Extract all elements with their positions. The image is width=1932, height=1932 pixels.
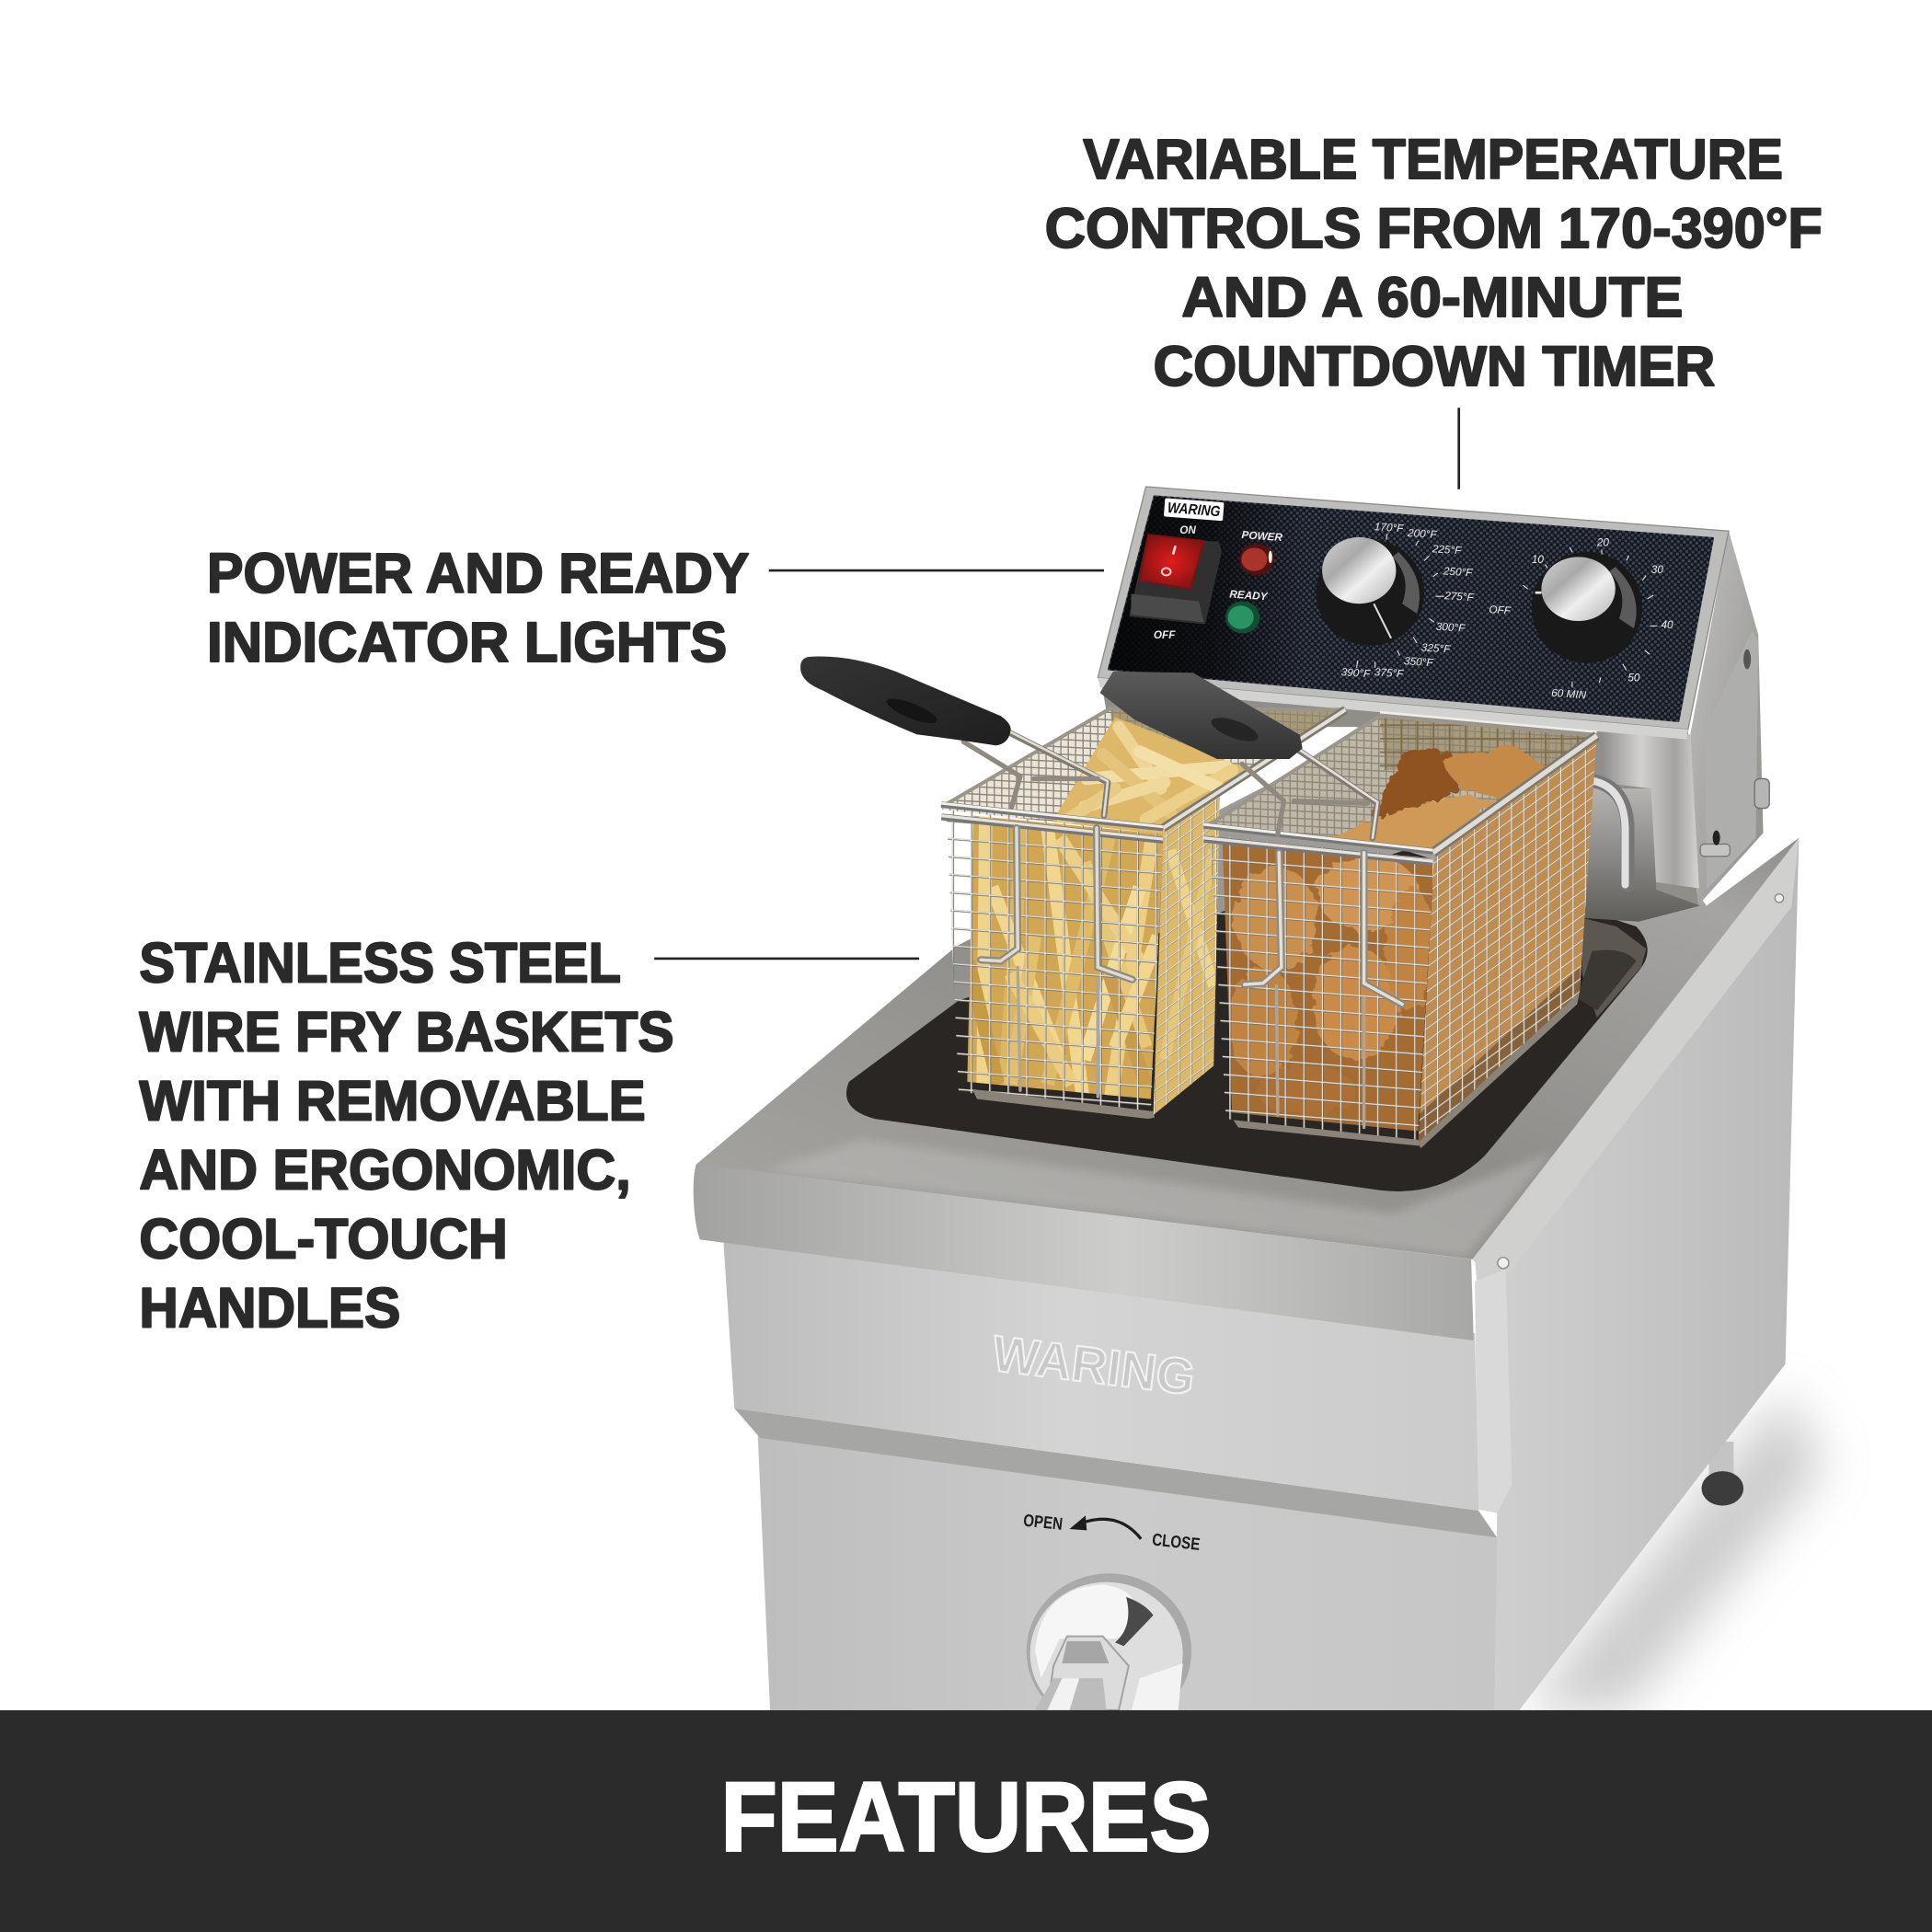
rocker switch [1131, 535, 1220, 622]
panel labels: OFF [1154, 629, 1176, 641]
housing lower front [1602, 730, 1699, 889]
callout: fry baskets: HANDLES [139, 1276, 400, 1339]
panel labels: 225°F [1431, 543, 1463, 557]
fries behind mesh [967, 816, 1163, 1099]
panel labels: 275°F [1443, 590, 1475, 604]
embossed logo: WARING [989, 1325, 1198, 1406]
callout: fry baskets [139, 931, 674, 1339]
panel labels: 40 [1662, 619, 1673, 631]
drain valve labels [1022, 1511, 1201, 1554]
upper front panel [723, 1238, 1478, 1511]
side lip [1472, 838, 1799, 1282]
panel labels: 350°F [1404, 655, 1434, 669]
panel labels: POWER [1241, 529, 1283, 544]
left fry basket [937, 702, 1355, 1119]
fryer illustration [694, 487, 1799, 1729]
leader line: indicator lights [769, 569, 1104, 571]
callout: fry baskets: AND ERGONOMIC, [139, 1138, 631, 1201]
front mesh [1210, 835, 1434, 1143]
side edge strip [1475, 1269, 1512, 1513]
dial ticks [1357, 534, 1657, 687]
panel labels: 30 [1651, 564, 1663, 576]
chicken behind mesh [1223, 838, 1434, 1131]
basket rim [941, 708, 1345, 840]
callout: indicator lights: POWER AND READY [207, 542, 749, 604]
callout: fry baskets: STAINLESS STEEL [139, 931, 621, 994]
panel labels: 390°F [1340, 666, 1371, 680]
callout: temperature controls: AND A 60-MINUTE [1181, 266, 1683, 328]
icon: rubber foot [1702, 1442, 1743, 1506]
tabletop highlight [764, 1140, 1553, 1257]
basket hanger wires [981, 828, 1133, 1097]
panel labels: READY [1229, 588, 1269, 603]
side face [1419, 736, 1597, 1143]
callout: temperature controls: VARIABLE TEMPERATURE [1083, 128, 1783, 190]
power light [1239, 544, 1274, 575]
callout: temperature controls: CONTROLS FROM 170-390°F [1045, 197, 1823, 259]
logo: WARING [1167, 500, 1221, 520]
drain valve labels: CLOSE [1151, 1530, 1201, 1554]
front mesh [947, 810, 1163, 1115]
panel labels: 60 MIN [1551, 687, 1587, 701]
panel labels: ON [1179, 524, 1196, 536]
panel labels: OFF [1489, 604, 1512, 617]
panel labels: 20 [1596, 536, 1609, 548]
callout: fry baskets: COOL-TOUCH [139, 1207, 508, 1270]
right handle [1101, 673, 1301, 758]
callout: indicator lights [207, 542, 749, 673]
panel labels: 50 [1627, 673, 1640, 684]
side panel [1475, 838, 1799, 1710]
tabletop [696, 740, 1799, 1259]
panel labels: 300°F [1435, 621, 1466, 635]
callout: indicator lights: INDICATOR LIGHTS [207, 611, 727, 673]
ready light [1225, 602, 1259, 633]
callout: temperature controls: COUNTDOWN TIMER [1154, 335, 1715, 397]
control panel frame [1098, 487, 1729, 730]
panel labels: 10 [1532, 554, 1544, 566]
basket opening [1214, 718, 1587, 848]
front lip [694, 1165, 1474, 1340]
callout: fry baskets: WITH REMOVABLE [139, 1069, 646, 1132]
band [734, 1409, 1497, 1537]
control panel [1097, 487, 1713, 720]
footer banner [0, 1710, 1932, 1932]
panel labels [1154, 521, 1673, 701]
floor shadow [1522, 1392, 1823, 1710]
basket opening [942, 710, 1334, 834]
housing side plate [1706, 631, 1758, 890]
heating element tube [1587, 780, 1627, 885]
valve stem [1035, 1678, 1107, 1710]
drain valve [1027, 1573, 1191, 1729]
timer knob [1532, 552, 1642, 663]
leader line: fry baskets [654, 958, 919, 960]
drain valve labels: OPEN [1022, 1511, 1064, 1534]
well opening [846, 850, 1648, 1191]
banner heading: FEATURES [720, 1762, 1212, 1872]
callout: fry baskets: WIRE FRY BASKETS [139, 1000, 674, 1063]
bolts [1498, 650, 1784, 1269]
basket rim [1203, 712, 1597, 863]
panel labels: 375°F [1374, 666, 1405, 680]
leader line: temperature controls [1458, 408, 1460, 489]
back wall [1100, 675, 1698, 905]
right fry basket [1202, 708, 1608, 1148]
panel labels: 170°F [1374, 521, 1405, 535]
side face [1154, 795, 1220, 1115]
panel labels: 200°F [1407, 527, 1438, 541]
panel labels: 325°F [1420, 641, 1451, 656]
basket hanger wires [1245, 853, 1402, 1127]
back shadow area [1582, 788, 1700, 922]
hex nut [1047, 1637, 1129, 1710]
panel lower strip [1098, 678, 1688, 740]
lower front panel [758, 1435, 1497, 1710]
basket rods [963, 732, 1377, 838]
left handle [800, 657, 1011, 745]
callout: temperature controls [1045, 128, 1823, 397]
temperature knob [1316, 537, 1424, 646]
housing side [1691, 531, 1764, 905]
panel labels: 250°F [1442, 565, 1474, 580]
